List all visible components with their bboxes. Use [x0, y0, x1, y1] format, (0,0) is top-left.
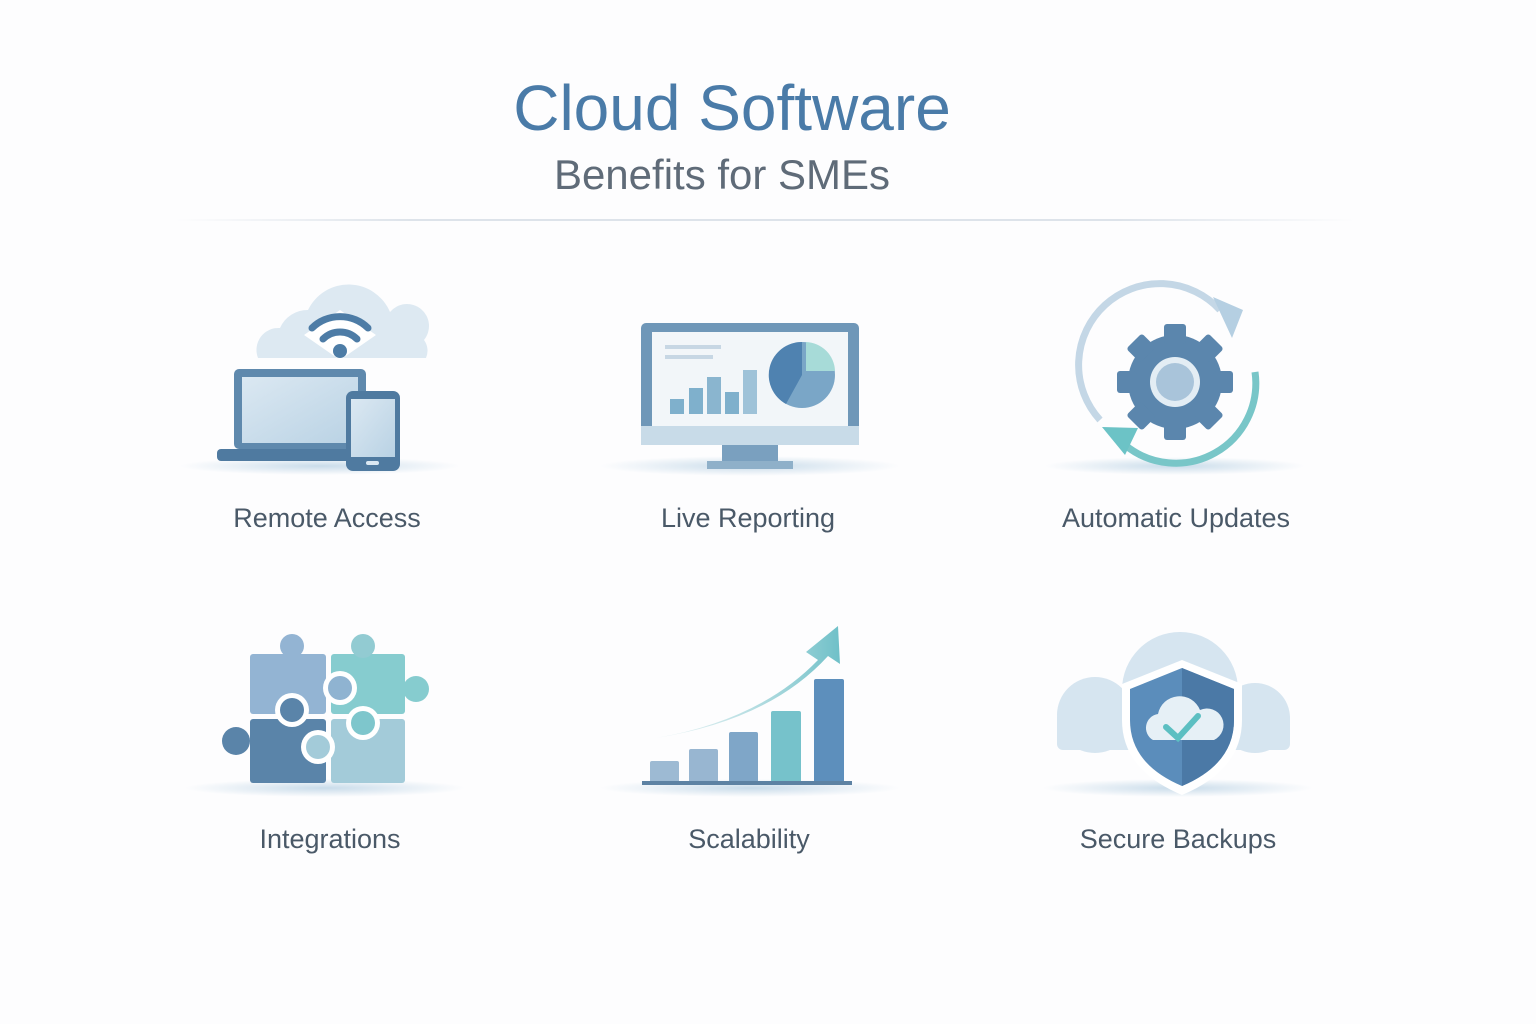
label: integrations: Integrations — [259, 824, 401, 854]
label: automatic updates: Automatic Updates — [1062, 503, 1290, 533]
icon: integrations — [185, 634, 465, 797]
label: live reporting: Live Reporting — [661, 503, 835, 533]
icon: live reporting — [600, 323, 900, 476]
icon: remote access — [180, 285, 460, 475]
title: Cloud Software — [513, 72, 951, 144]
icon: secure backups — [1043, 632, 1313, 797]
subtitle: Benefits for SMEs — [554, 151, 890, 198]
icon: automatic updates — [1045, 284, 1305, 475]
icon: scalability — [600, 626, 900, 797]
label: secure backups: Secure Backups — [1080, 824, 1276, 854]
label: remote access: Remote Access — [233, 503, 421, 533]
label: scalability: Scalability — [688, 824, 810, 854]
